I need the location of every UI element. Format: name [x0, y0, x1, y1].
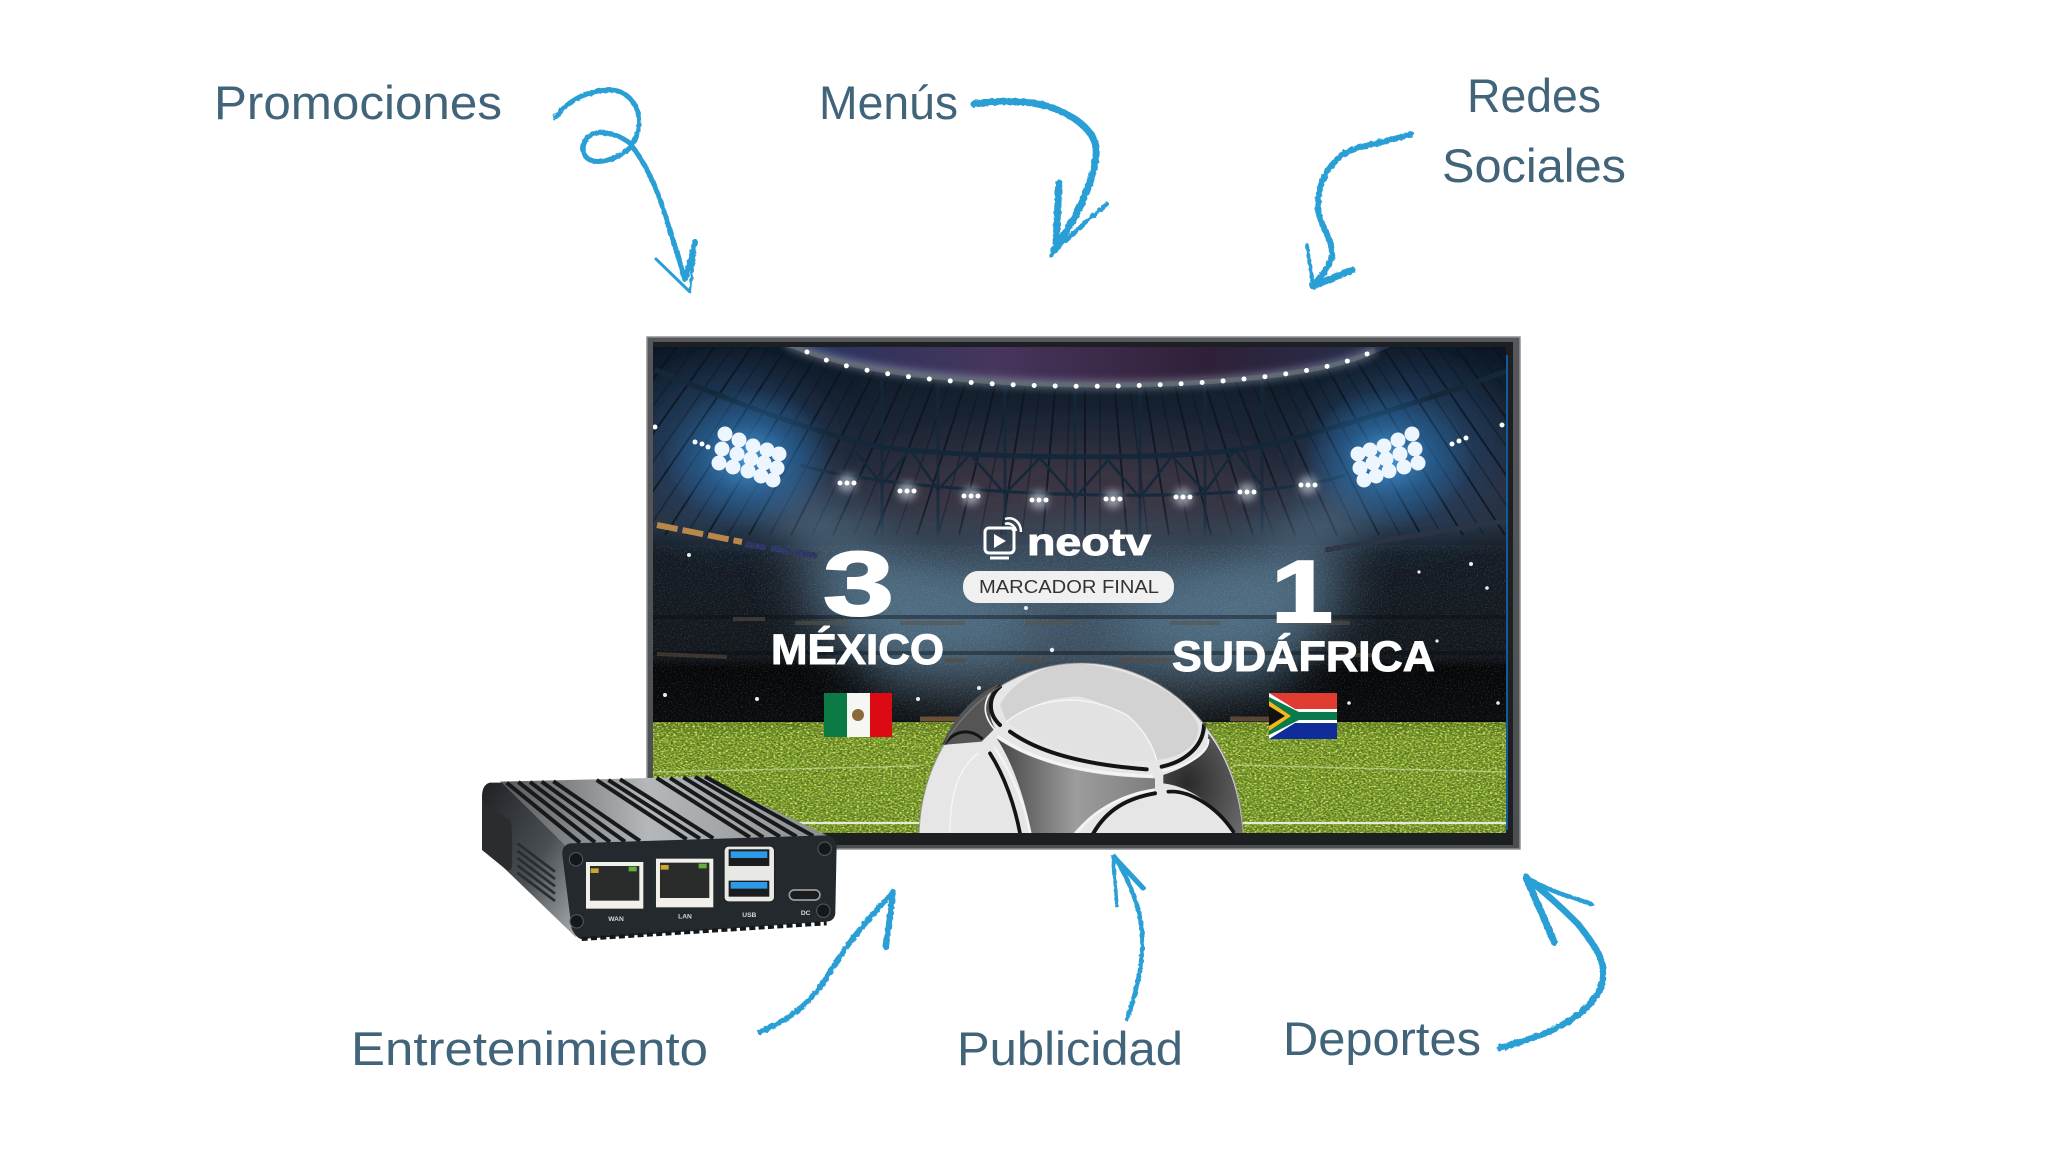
score: Sudáfrica: 1 [1271, 542, 1333, 641]
monitor [646, 336, 1521, 850]
port: DC [789, 890, 820, 900]
screen content [653, 347, 1506, 833]
media player device [482, 777, 837, 939]
label: Redes Sociales: Sociales [1442, 139, 1626, 192]
port labels: DC [801, 910, 811, 917]
logo icon [985, 518, 1021, 558]
roof truss [655, 370, 1510, 535]
score: Sudáfrica [1172, 560, 1434, 672]
label: Promociones: Promociones [214, 76, 502, 129]
score: México: 3 [823, 534, 894, 635]
neotv logo [985, 518, 1151, 564]
right floodlight [1304, 388, 1504, 528]
ball dome panel [1000, 663, 1198, 760]
flag: Mexico [824, 693, 892, 737]
score: México: MÉXICO [771, 626, 944, 674]
ball side panels [942, 683, 1000, 745]
pill: marcador final [963, 571, 1174, 603]
soccer ball [918, 662, 1244, 833]
label: Redes Sociales [1442, 69, 1626, 192]
device side [482, 783, 576, 937]
ball seams [945, 687, 1233, 833]
flag: South Africa [1269, 693, 1337, 739]
port: WAN [586, 862, 643, 909]
port labels: WAN [608, 916, 624, 923]
left floodlight [652, 388, 833, 528]
small lights row [838, 474, 1318, 509]
pill: marcador final: MARCADOR FINAL [979, 577, 1159, 597]
lights arc [785, 342, 1375, 386]
roof blue tint [640, 370, 1497, 530]
label: Redes Sociales: Redes [1467, 69, 1601, 122]
pitch [653, 722, 1510, 834]
arrow: Menús [974, 101, 1107, 256]
label: Publicidad: Publicidad [957, 1022, 1183, 1075]
sky above the lights [785, 347, 1390, 386]
crowd texture [653, 545, 1510, 720]
port: LAN [656, 859, 713, 907]
device front panel [562, 835, 837, 939]
screen edge [1506, 355, 1508, 830]
monitor bezel [647, 337, 1520, 849]
label: Menús: Menús [819, 76, 958, 129]
arrow: Entretenimiento [760, 892, 893, 1032]
score: México [773, 550, 943, 665]
port labels [608, 910, 811, 923]
arrow: Deportes [1500, 877, 1603, 1048]
stands sparkles [663, 553, 1500, 705]
score: Sudáfrica: SUDÁFRICA [1172, 633, 1435, 681]
arrow: Publicidad [1113, 856, 1143, 1019]
roof ribs [653, 347, 1506, 536]
screws [569, 842, 831, 928]
port labels: LAN [678, 913, 692, 920]
port: USB [724, 846, 775, 902]
arrow: Redes Sociales [1307, 134, 1411, 286]
stand edge strips [657, 520, 1510, 556]
arrow: Promociones [555, 90, 695, 292]
beams and centre haze [760, 470, 1380, 710]
port labels: USB [742, 912, 757, 919]
label: Entretenimiento: Entretenimiento [351, 1022, 708, 1075]
logo text: neotv [1027, 522, 1151, 564]
label: Deportes: Deportes [1283, 1012, 1481, 1065]
crowd bands [653, 617, 1510, 719]
device top with fins [500, 777, 828, 845]
